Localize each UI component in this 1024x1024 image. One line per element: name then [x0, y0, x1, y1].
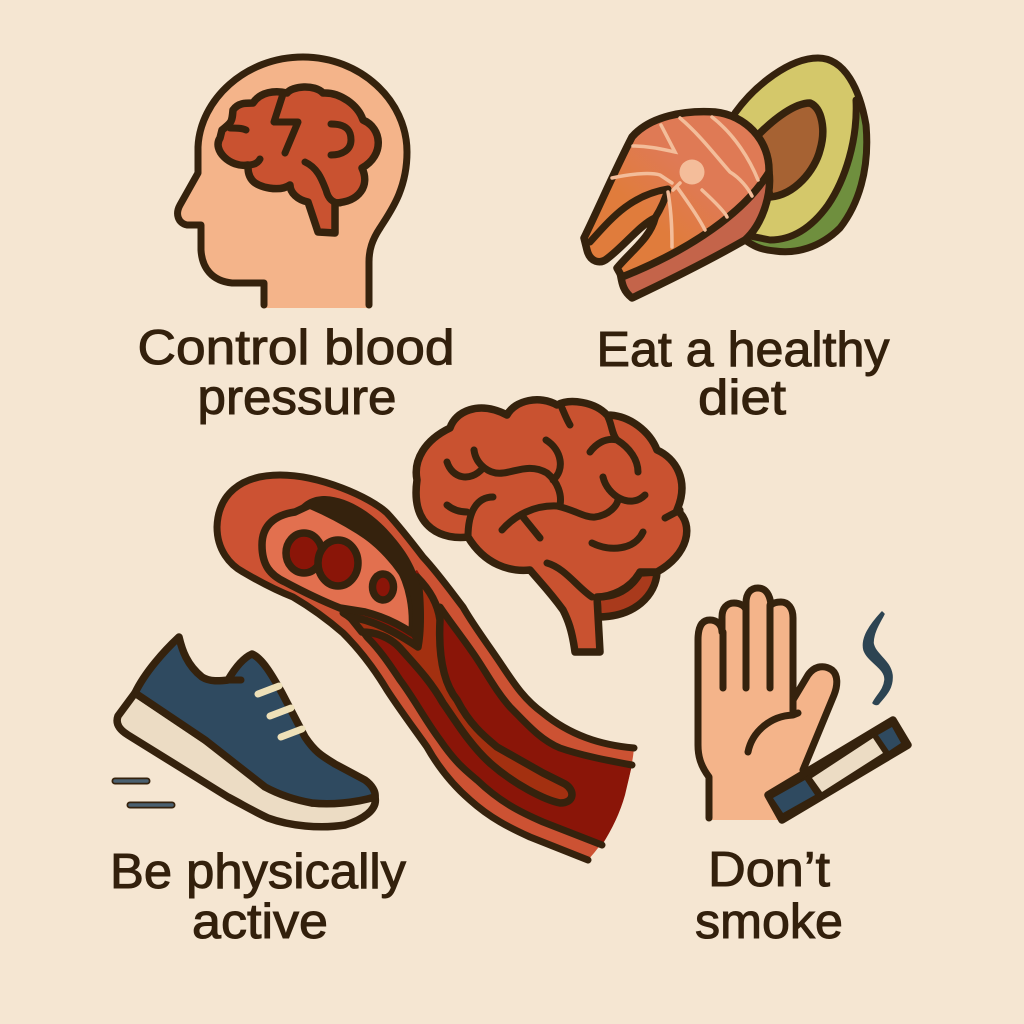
artery lumen: [343, 570, 632, 845]
icon: hand: [698, 588, 837, 820]
avocado flesh: [735, 58, 857, 240]
label: don't smoke: Don’t: [708, 843, 830, 897]
cigarette filter: [773, 780, 815, 813]
dark crescent: [296, 496, 420, 650]
icon: running shoe: [115, 637, 375, 827]
label: be physically active: Be physically: [110, 845, 407, 899]
icon: cigarette: [768, 720, 908, 820]
label: control blood pressure: pressure: [198, 371, 396, 425]
illustration: brain: [416, 400, 687, 652]
icon: avocado: [735, 58, 867, 252]
label: control blood pressure: Control blood: [138, 321, 454, 375]
speed lines: [115, 781, 172, 805]
label: eat a healthy diet: diet: [698, 371, 786, 425]
inner chamber: [262, 505, 412, 633]
avocado pit: [758, 103, 823, 197]
label: be physically active: active: [192, 895, 328, 949]
label: don't smoke: smoke: [695, 895, 843, 949]
label: control blood pressure: [138, 321, 454, 425]
plaque band: [350, 577, 572, 803]
icon: head with brain: [178, 57, 407, 308]
icon: smoke: [863, 612, 892, 704]
label: be physically active: [110, 845, 407, 949]
blood cells: [286, 533, 394, 600]
label: eat a healthy diet: Eat a healthy: [596, 323, 890, 377]
illustration: artery with blood cells: [217, 475, 634, 860]
shoe laces: [258, 686, 302, 737]
icon: salmon steak: [584, 112, 770, 298]
small brain: [218, 87, 378, 233]
label: don't smoke: [695, 843, 843, 949]
label: eat a healthy diet: [596, 323, 890, 425]
salmon bone: [680, 160, 704, 184]
